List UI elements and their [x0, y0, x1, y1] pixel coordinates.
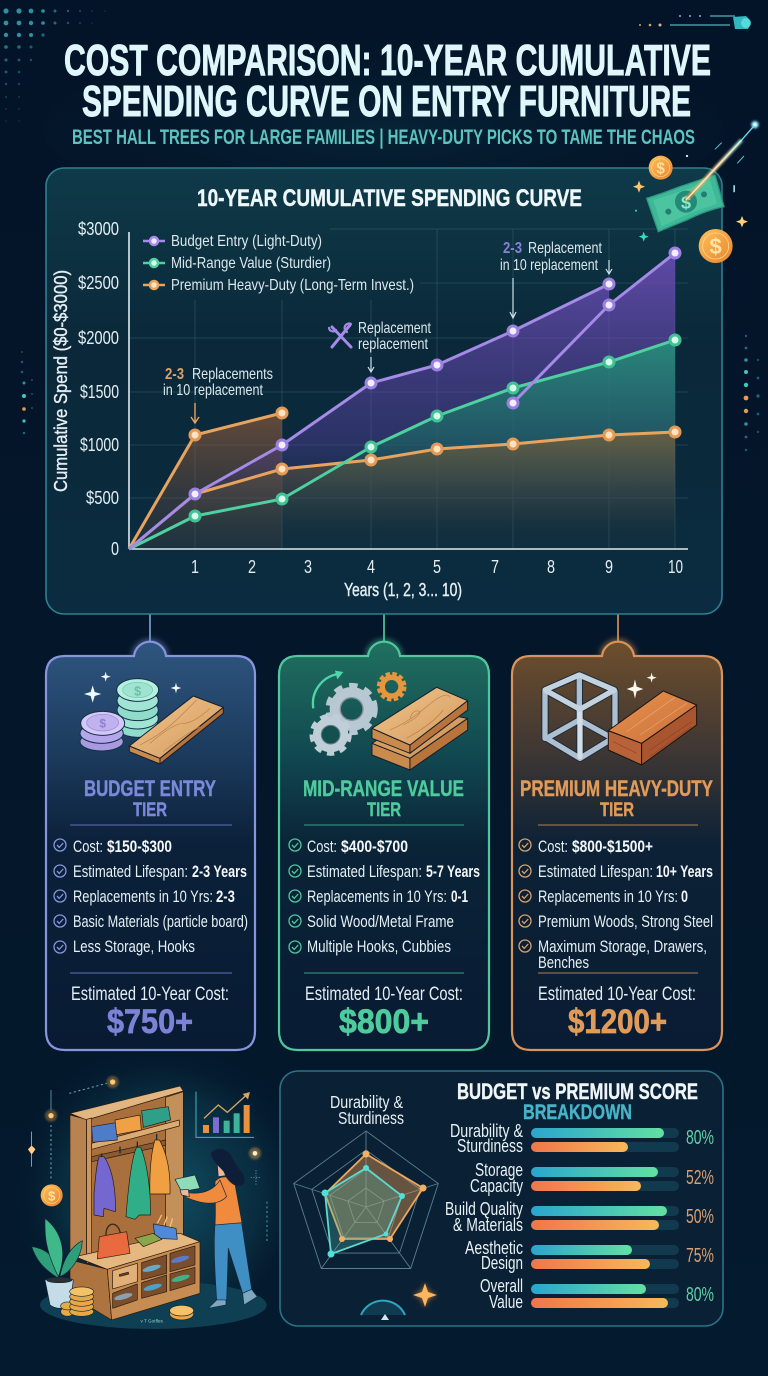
icon: money, coins and comet: $	[681, 192, 691, 212]
y axis labels: $2000	[78, 328, 119, 348]
radar label: Durability &	[330, 1092, 403, 1112]
icon: plant and coins	[32, 1218, 194, 1320]
bar row: durability: Sturdiness	[457, 1136, 523, 1156]
annotation: late replacement: in 10 replacement	[500, 257, 598, 274]
bar row: storage	[470, 1160, 714, 1196]
estimated cost: $750+	[107, 1003, 193, 1041]
panel: spending chart	[46, 168, 722, 614]
x axis labels: 9	[605, 557, 613, 577]
x axis title: Years (1, 2, 3... 10)	[344, 580, 462, 600]
feature list: Solid Wood/Metal Frame	[307, 912, 454, 931]
x axis labels: 4	[367, 557, 375, 577]
bar row: overall value: Overall	[480, 1276, 523, 1296]
tier heading: PREMIUM HEAVY-DUTY	[520, 776, 713, 801]
bar row: durability: Durability &	[450, 1121, 523, 1141]
estimated cost	[538, 984, 696, 1041]
y axis labels	[78, 219, 119, 559]
annotation: late replacement	[500, 240, 612, 318]
feature list: Estimated Lifespan:	[73, 862, 188, 881]
x axis labels: 5	[433, 557, 441, 577]
bar row: build quality: & Materials	[453, 1215, 523, 1235]
line chart	[51, 219, 688, 600]
bar row: aesthetic	[465, 1238, 714, 1273]
feature list: Premium Woods, Strong Steel	[538, 912, 713, 931]
icon: woman holding cash	[175, 1149, 257, 1308]
bar row: overall value: Value	[489, 1292, 523, 1312]
decorative streak top right	[639, 15, 751, 29]
bar row: build quality	[445, 1199, 714, 1235]
x axis labels	[191, 557, 683, 577]
feature list: 5-7 Years	[426, 862, 480, 881]
feature list: Replacements in 10 Yrs:	[538, 887, 678, 906]
tier heading	[84, 776, 216, 821]
series lines: green mid-range	[129, 335, 680, 549]
legend: Mid-Range Value (Sturdier)	[171, 255, 331, 272]
illustration: person at hall tree: v T Gotfles	[140, 1319, 163, 1324]
feature list: Cost:	[538, 837, 568, 856]
side dots right	[744, 335, 760, 451]
legend: Budget Entry (Light-Duty)	[171, 233, 322, 250]
tier heading: BUDGET ENTRY	[84, 776, 216, 801]
bar row: aesthetic: 75%	[686, 1245, 714, 1267]
feature list: Estimated Lifespan:	[538, 862, 653, 881]
side dots left	[21, 351, 33, 434]
estimated cost: Estimated 10-Year Cost:	[305, 984, 463, 1005]
radar label: Sturdiness	[338, 1108, 404, 1128]
bar row: durability	[450, 1121, 714, 1156]
feature list: Basic Materials (particle board)	[73, 912, 248, 931]
icon: coins and plank: $	[134, 684, 141, 698]
feature list: Cost:	[73, 837, 103, 856]
radar label	[330, 1092, 404, 1128]
annotation: early replacements: 2-3	[165, 366, 184, 383]
radar chart	[294, 1092, 438, 1268]
estimated cost: Estimated 10-Year Cost:	[71, 984, 229, 1005]
feature list: Benches	[538, 953, 589, 972]
icon: dotted trail and glow dots: $	[48, 1188, 56, 1203]
feature list	[289, 837, 480, 956]
estimated cost: $800+	[339, 1003, 429, 1041]
score heading: BUDGET vs PREMIUM SCORE	[457, 1079, 698, 1104]
icon: money, coins and comet	[633, 121, 759, 263]
series lines: purple budget	[129, 248, 680, 549]
bar row: build quality: Build Quality	[445, 1199, 523, 1219]
bar row: durability: 80%	[686, 1127, 714, 1149]
y axis labels: $2500	[78, 273, 119, 293]
feature list: $150-$300	[107, 837, 172, 856]
bar row: aesthetic: Design	[481, 1253, 523, 1273]
icon: money, coins and comet: $	[710, 234, 722, 259]
panel: budget entry tier	[46, 642, 255, 1050]
annotation: mid replacement with wrench icon	[329, 320, 431, 372]
decorative dot grid top left	[3, 8, 106, 122]
estimated cost: $1200+	[568, 1003, 667, 1041]
tier heading: TIER	[600, 800, 634, 821]
chart title: 10-YEAR CUMULATIVE SPENDING CURVE	[197, 185, 582, 212]
bar row: storage: Capacity	[470, 1176, 523, 1196]
feature list: $800-$1500+	[572, 837, 653, 856]
annotation: early replacements: in 10 replacement	[163, 382, 263, 399]
panel: premium heavy-duty tier	[512, 642, 722, 1050]
feature list	[519, 837, 713, 972]
panel: mid-range value tier	[279, 642, 489, 1050]
tier heading	[303, 776, 464, 821]
bar row: aesthetic: Aesthetic	[465, 1238, 523, 1258]
score heading	[457, 1079, 698, 1124]
bar row: build quality: 50%	[686, 1206, 714, 1228]
annotation: mid replacement with wrench icon: replacement	[358, 336, 428, 353]
feature list: Less Storage, Hooks	[73, 937, 195, 956]
icon: gears and planks	[312, 671, 468, 770]
x axis labels: 7	[491, 557, 499, 577]
y axis labels: 0	[111, 539, 119, 559]
connector lines	[150, 614, 618, 644]
annotation: early replacements	[163, 366, 273, 423]
annotation: late replacement: Replacement	[528, 240, 602, 257]
icon: money, coins and comet: $	[656, 160, 665, 177]
x axis labels: 1	[191, 557, 199, 577]
icon: coins and plank: $	[99, 716, 106, 730]
tier heading: TIER	[367, 800, 401, 821]
feature list: Replacements in 10 Yrs:	[307, 887, 447, 906]
y axis labels: $500	[86, 488, 119, 508]
legend: Premium Heavy-Duty (Long-Term Invest.)	[171, 277, 414, 294]
tier heading: MID-RANGE VALUE	[303, 776, 464, 801]
decoration: dome and sparkle	[361, 1283, 437, 1320]
feature list: Replacements in 10 Yrs:	[73, 887, 213, 906]
icon: dotted trail and glow dots	[28, 1076, 267, 1242]
tier heading: TIER	[133, 800, 167, 821]
annotation: mid replacement with wrench icon: Replacement	[358, 320, 431, 337]
feature list: Multiple Hooks, Cubbies	[307, 937, 451, 956]
annotation: early replacements: Replacements	[192, 366, 273, 383]
score heading: BREAKDOWN	[523, 1101, 632, 1124]
x axis labels: 10	[668, 557, 683, 577]
icon: coins and plank	[80, 672, 223, 764]
icon: hall tree	[70, 1086, 200, 1320]
feature list: 0	[681, 887, 688, 906]
feature list: $400-$700	[341, 837, 408, 856]
feature list: 2-3 Years	[192, 862, 247, 881]
feature list: Estimated Lifespan:	[307, 862, 422, 881]
feature list	[54, 837, 248, 956]
annotation: late replacement: 2-3	[503, 240, 522, 257]
y axis labels: $3000	[78, 219, 119, 239]
legend	[143, 233, 414, 294]
bar row: storage: Storage	[475, 1160, 523, 1180]
icon: steel frame and wood block	[545, 673, 697, 765]
feature list: 2-3	[216, 887, 235, 906]
feature list: Cost:	[307, 837, 337, 856]
x axis labels: 8	[547, 557, 555, 577]
area fills	[129, 253, 675, 549]
feature list: Maximum Storage, Drawers,	[538, 937, 707, 956]
icon: mini bar chart	[196, 1092, 254, 1137]
tier heading	[520, 776, 713, 821]
feature list: 0-1	[451, 887, 468, 906]
axes	[129, 232, 688, 549]
x axis labels: 3	[304, 557, 312, 577]
bar row: storage: 52%	[686, 1167, 714, 1189]
y axis labels: $1500	[80, 382, 119, 402]
estimated cost	[305, 984, 463, 1041]
bar row: overall value	[480, 1276, 714, 1312]
illustration: person at hall tree	[7, 1053, 287, 1333]
y axis labels: $1000	[80, 435, 119, 455]
bar row: overall value: 80%	[686, 1284, 714, 1306]
panel: score breakdown	[280, 1071, 723, 1326]
x axis labels: 2	[248, 557, 256, 577]
series lines: orange premium	[129, 408, 680, 549]
estimated cost: Estimated 10-Year Cost:	[538, 984, 696, 1005]
title	[64, 36, 711, 126]
estimated cost	[71, 984, 229, 1041]
feature list: 10+ Years	[656, 862, 713, 881]
y axis title: Cumulative Spend ($0-$3000)	[51, 270, 71, 492]
